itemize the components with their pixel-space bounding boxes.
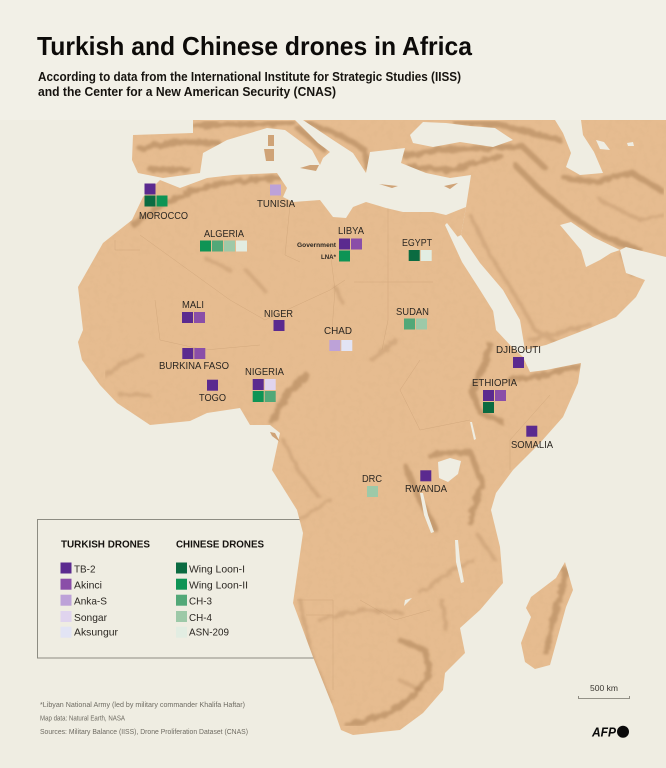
country: Egypt: EGYPT bbox=[402, 237, 432, 249]
footnotes and sources: *Libyan National Army (led by military commander Khalifa Haftar) bbox=[40, 700, 245, 709]
legend: Chinese drones: CHINESE DRONES bbox=[176, 538, 264, 550]
legend: Turkish drones: Songar bbox=[74, 612, 107, 624]
footnotes and sources bbox=[40, 700, 248, 736]
country: Ethiopia bbox=[472, 377, 517, 413]
country: Morocco: MOROCCO bbox=[139, 210, 188, 222]
country: Mali: MALI bbox=[182, 299, 204, 311]
country: Burkina Faso bbox=[159, 348, 229, 372]
country borders bbox=[115, 205, 550, 690]
land masses bbox=[78, 120, 666, 735]
inland seas and lakes bbox=[404, 120, 634, 606]
legend: Turkish drones: Aksungur bbox=[74, 626, 118, 638]
title: Turkish and Chinese drones in Africa bbox=[37, 31, 473, 61]
footnotes and sources: Map data: Natural Earth, NASA bbox=[40, 714, 126, 722]
legend: Chinese drones: CH-4 bbox=[189, 612, 212, 624]
country: Tunisia bbox=[257, 184, 295, 210]
country: Ethiopia: ETHIOPIA bbox=[472, 377, 517, 389]
country: Algeria bbox=[200, 228, 247, 252]
legend: Turkish drones: TURKISH DRONES bbox=[61, 538, 150, 550]
country: Algeria: ALGERIA bbox=[204, 228, 244, 240]
scale bar: 500 km bbox=[590, 683, 618, 693]
country: Togo bbox=[199, 380, 226, 404]
country: Niger: NIGER bbox=[264, 308, 293, 320]
country: Chad bbox=[324, 325, 352, 351]
country: Nigeria bbox=[245, 366, 284, 402]
country: Morocco bbox=[139, 184, 188, 222]
legend: Chinese drones: Wing Loon-I bbox=[189, 564, 245, 576]
country: Tunisia: TUNISIA bbox=[257, 198, 295, 210]
country: Libya: LNA* bbox=[321, 254, 336, 261]
scale bar bbox=[578, 683, 630, 698]
legend: Chinese drones: CH-3 bbox=[189, 596, 212, 608]
country: Libya: LIBYA bbox=[338, 225, 364, 237]
country: Chad: CHAD bbox=[324, 325, 352, 337]
AFP logo: AFP bbox=[591, 726, 617, 740]
country: Djibouti bbox=[496, 344, 541, 368]
legend: Turkish drones bbox=[60, 538, 150, 638]
country: Egypt bbox=[402, 237, 432, 261]
subtitle: According to data from the International Institute for Strategic Studies (IISS) bbox=[38, 70, 461, 84]
country: DRC: DRC bbox=[362, 473, 382, 485]
AFP logo bbox=[591, 726, 629, 740]
legend: Turkish drones: TB-2 bbox=[74, 564, 96, 576]
legend: Chinese drones: Wing Loon-II bbox=[189, 580, 248, 592]
legend: Turkish drones: Akinci bbox=[74, 580, 102, 592]
terrain grain and mountain relief bbox=[105, 121, 664, 726]
footnotes and sources: Sources: Military Balance (IISS), Drone Proliferation Dataset (CNAS) bbox=[40, 727, 248, 736]
country: DRC bbox=[362, 473, 382, 497]
subtitle bbox=[38, 70, 461, 99]
country: Togo: TOGO bbox=[199, 392, 226, 404]
country: Mali bbox=[182, 299, 205, 323]
country: Libya bbox=[297, 225, 364, 262]
country: Rwanda: RWANDA bbox=[405, 483, 447, 495]
country: Sudan bbox=[396, 306, 429, 330]
country: Somalia bbox=[511, 426, 553, 451]
legend: Turkish drones: Anka-S bbox=[74, 596, 107, 608]
country: Sudan: SUDAN bbox=[396, 306, 429, 318]
map: land and relief bbox=[78, 120, 666, 735]
country: Rwanda bbox=[405, 470, 447, 495]
legend: Chinese drones: ASN-209 bbox=[189, 626, 229, 638]
country: Niger bbox=[264, 308, 293, 331]
country: Libya: Government bbox=[297, 242, 337, 249]
country: Djibouti: DJIBOUTI bbox=[496, 344, 541, 356]
country: Nigeria: NIGERIA bbox=[245, 366, 284, 378]
country: Somalia: SOMALIA bbox=[511, 439, 553, 451]
legend box frame bbox=[38, 520, 338, 658]
subtitle: and the Center for a New American Security (CNAS) bbox=[38, 85, 336, 99]
country: Burkina Faso: BURKINA FASO bbox=[159, 360, 229, 372]
legend: Chinese drones bbox=[176, 538, 264, 638]
